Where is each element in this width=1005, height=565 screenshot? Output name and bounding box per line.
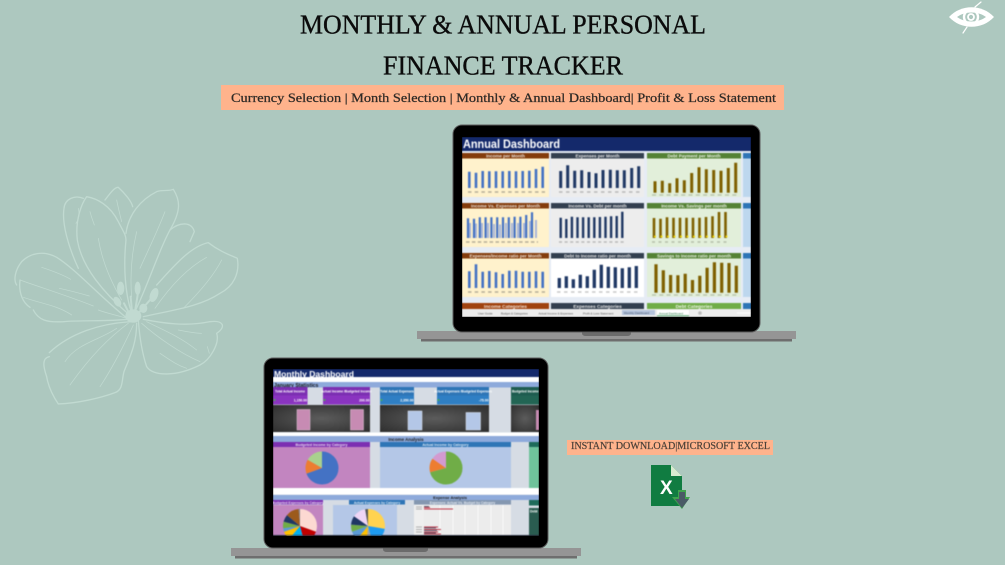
download banner: INSTANT DOWNLOAD|MICROSOFT EXCEL xyxy=(571,441,770,452)
dashboard title bar xyxy=(273,369,539,379)
kpi: total actual income: 1,150.00 xyxy=(294,398,307,402)
spreadsheet tab bar: Monthly Dashboard xyxy=(624,311,649,315)
chart: income vs savings per month xyxy=(647,203,741,247)
panel: actual expenses by category: Actual Expenses by Category xyxy=(354,501,400,505)
subtitle banner xyxy=(221,85,784,110)
expense analysis band: Expense Analysis xyxy=(433,495,468,500)
panel: actual income by category xyxy=(380,442,511,488)
panel: expenses actual vs budget bar chart: Expenses: Actual Vs. Budget by Category xyxy=(430,501,495,505)
spreadsheet tab bar xyxy=(462,309,751,317)
laptop bezel xyxy=(264,358,548,548)
screen: monthly dashboard xyxy=(272,369,539,536)
spreadsheet tab bar: Annual Dashboard xyxy=(659,312,683,316)
chart: budget columns cut-off xyxy=(511,405,539,432)
panel: actual income by category: Actual Income by Category xyxy=(422,443,469,447)
panel: expenses actual vs budget bar chart xyxy=(414,500,511,536)
chart: income vs expenses per month: Income Vs. Expenses per Month xyxy=(471,204,540,209)
title xyxy=(300,10,706,80)
chart: expenses to income ratio: Expenses/Income ratio per Month xyxy=(469,254,542,259)
chart: expenses per month xyxy=(551,153,644,197)
panel: budgeted income by category: Budgeted Income by Category xyxy=(296,443,347,447)
kpi: total actual income: Total Actual Income xyxy=(275,390,305,394)
kpi: total actual expenses: Total Actual Expenses xyxy=(380,390,414,394)
pie chart: actual expenses xyxy=(360,518,376,534)
row 1 charts xyxy=(462,153,751,197)
row 2 charts xyxy=(462,203,751,247)
chart: expenses to income ratio xyxy=(462,253,549,297)
kpi: actual vs budgeted income xyxy=(321,387,372,404)
kpi: budgeted income cut-off: Budgeted Income xyxy=(512,390,539,394)
laptop bezel xyxy=(453,125,760,332)
chart: right cut-off panel row 1 xyxy=(743,153,751,197)
chart: right cut-off panel row 3 xyxy=(743,253,751,297)
kpi: actual vs budgeted expenses: Actual Expenses /Budgeted Expenses xyxy=(434,390,492,394)
chart: savings to income ratio xyxy=(647,253,741,297)
pie chart: actual income xyxy=(438,460,454,476)
panel: budgeted expenses by category: Budgeted Expenses by Category xyxy=(272,501,324,505)
kpi: budgeted income cut-off xyxy=(511,387,539,404)
kpi: actual vs budgeted income: 200.00 xyxy=(359,398,370,402)
chart: debt to income ratio xyxy=(551,253,644,297)
category headers: Income Categories xyxy=(484,304,527,310)
panel: budgeted income by category xyxy=(273,442,370,488)
expense analysis band xyxy=(273,495,539,500)
kpi: actual vs budgeted expenses: -75.00 xyxy=(479,398,489,402)
kpi: total actual expenses xyxy=(380,387,414,404)
chart: expense columns xyxy=(380,405,489,432)
spreadsheet tab bar: Profit & Loss Statement xyxy=(583,312,614,316)
category headers: Expenses Categories xyxy=(573,304,622,310)
chart: debt payment per month xyxy=(647,153,741,197)
laptop: monthly dashboard xyxy=(231,358,581,558)
chart: income vs savings per month: Income Vs. Savings per month xyxy=(661,204,727,209)
dashboard title bar: Annual Dashboard xyxy=(463,139,560,151)
chart: income per month xyxy=(462,153,549,197)
dashboard title bar: Monthly Dashboard xyxy=(274,369,354,379)
chart: income vs debt per month xyxy=(551,203,644,247)
decorative flower outline xyxy=(15,187,238,404)
dashboard title bar xyxy=(462,137,751,151)
pie chart: budgeted expenses xyxy=(292,518,308,534)
chart: income vs expenses per month xyxy=(462,203,549,247)
chart: income per month: Income per Month xyxy=(486,154,525,159)
chart: income columns xyxy=(273,405,370,432)
icon: excel file with download arrow xyxy=(651,465,690,509)
january statistics band: January Statistics xyxy=(274,383,319,389)
kpi: actual vs budgeted expenses xyxy=(434,387,492,404)
kpi: total actual expenses: 2,350.00 xyxy=(400,398,414,402)
laptop: annual dashboard xyxy=(417,125,796,342)
subtitle banner: Currency Selection | Month Selection | Monthly & Annual Dashboard| Profit & Loss Statement xyxy=(231,90,776,105)
chart: savings to income ratio: Savings to Income ratio per month xyxy=(657,254,731,259)
chart: debt payment per month: Debt Payment per Month xyxy=(667,154,721,159)
chart: right cut-off panel row 2 xyxy=(743,203,751,247)
category headers xyxy=(462,303,751,310)
icon: eye logo xyxy=(949,2,994,33)
title: FINANCE TRACKER xyxy=(383,50,623,80)
january statistics band xyxy=(273,382,539,389)
spreadsheet tab bar: User Guide xyxy=(478,312,493,316)
kpi: actual vs budgeted income: Actual Income /Budgeted Income xyxy=(321,390,372,394)
kpi cards xyxy=(273,387,539,404)
laptop base xyxy=(231,548,581,558)
pie chart: budgeted income xyxy=(314,460,330,476)
kpi: total actual income xyxy=(273,387,308,404)
laptop base xyxy=(417,331,796,342)
category headers: Debt Categories xyxy=(676,304,713,310)
title: MONTHLY & ANNUAL PERSONAL xyxy=(300,10,706,40)
panel: income cut-off xyxy=(529,442,539,488)
panel: debt cut-off xyxy=(529,500,539,536)
chart: debt to income ratio: Debt to Income ratio per month xyxy=(564,254,631,259)
income analysis band: Income Analysis xyxy=(388,437,424,442)
panel: budgeted expenses by category xyxy=(272,500,324,536)
income analysis band xyxy=(273,436,539,442)
panel: actual expenses by category xyxy=(333,500,405,536)
chart: expenses per month: Expenses per Month xyxy=(575,154,620,159)
spreadsheet tab bar: Actual Income & Expenses xyxy=(538,312,574,316)
spreadsheet tab bar: Budget & Categories xyxy=(501,312,528,316)
dark column charts xyxy=(273,405,539,432)
screen: annual dashboard xyxy=(462,137,751,317)
panel: debt cut-off: Debt xyxy=(530,510,538,514)
chart: income vs debt per month: Income Vs. Debt per month xyxy=(568,204,627,209)
icon: excel file with download arrow: X xyxy=(660,478,673,499)
row 3 charts xyxy=(462,253,751,297)
